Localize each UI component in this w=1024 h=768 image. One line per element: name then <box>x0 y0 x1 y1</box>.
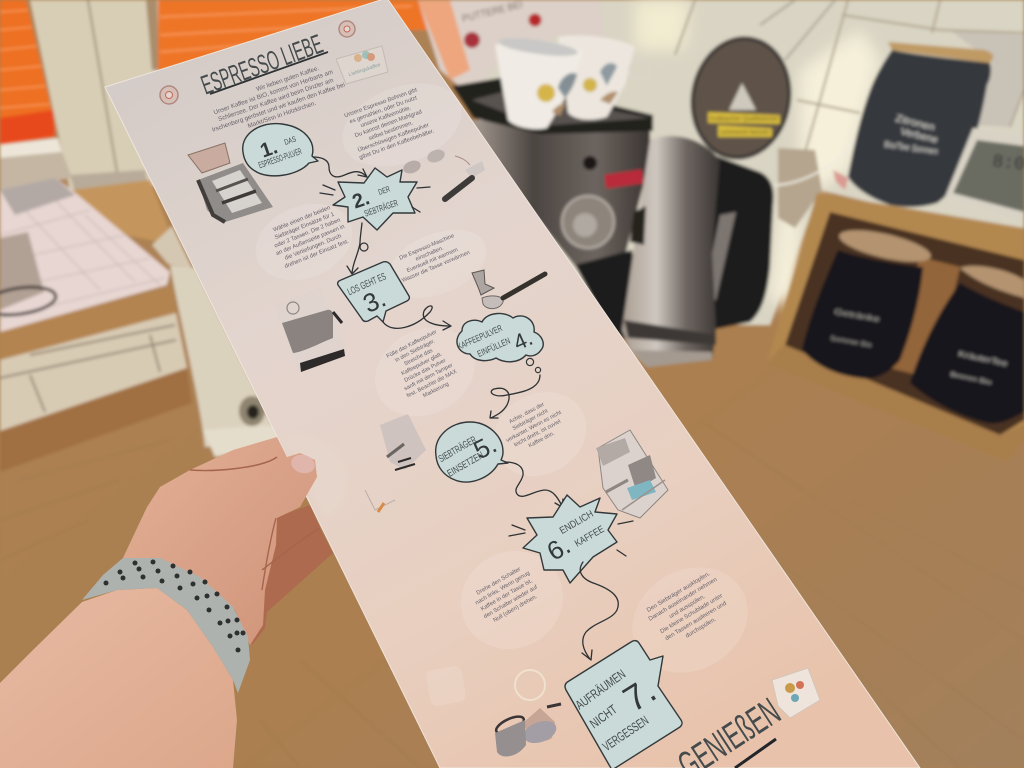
title <box>197 29 328 100</box>
text: step 4: Fülle das Kaffeepulver <box>386 329 438 360</box>
step 7: speech box: NICHT <box>587 701 620 731</box>
step 2: starburst: 2. <box>350 187 373 213</box>
arrow: 3 to 4 <box>383 306 451 330</box>
text: step 4: sanft mit dem Tamper <box>403 363 454 392</box>
background: orange blind right <box>158 0 440 72</box>
step 2: starburst: SIEBTRÄGER <box>363 198 399 219</box>
illustration: espresso machine <box>275 287 346 372</box>
watch band holes <box>104 560 246 652</box>
thumbnail <box>289 452 317 476</box>
text: step 2: drehen ist der Einsatz fest. <box>284 239 350 270</box>
background: wooden shelf <box>767 193 1024 462</box>
text: step 2: an der Außenseite passen in <box>275 224 346 257</box>
step 2: starburst: DER <box>377 184 391 197</box>
background: clock <box>945 128 1024 224</box>
step 1: bubble <box>243 124 318 176</box>
background: tile grout <box>675 0 1024 170</box>
background: kitchen: Bio/Tee Sonnen <box>884 139 939 156</box>
text: step 7: Danach auseinander nehmen <box>648 577 718 623</box>
text: step 5: Kaffee drin. <box>528 430 556 449</box>
text: step 6: Drehe den Schalter <box>476 566 522 597</box>
text: step 6: den Schalter wieder auf <box>483 584 539 620</box>
step 1: bubble: ESPRESSO-PULVER <box>257 146 303 170</box>
text: step 2: Wähle einen der beiden <box>272 205 331 234</box>
background: black jars lower <box>802 250 923 379</box>
background: cable <box>775 140 855 185</box>
step 6: starburst: 6. <box>542 530 575 567</box>
text: espresso beans: selbst bestimmen. <box>368 120 414 142</box>
illustration: cups and moka pot <box>494 704 561 756</box>
forearm <box>0 588 237 768</box>
fingers seen through sheet <box>282 434 348 520</box>
text: step 4: Streiche das <box>403 348 434 367</box>
watch band <box>82 558 250 693</box>
heading: geniessen <box>671 691 788 768</box>
paragraph backgrounds <box>244 68 767 693</box>
text: step 2: die Vertiefungen. Durch <box>284 233 342 262</box>
intro text: Irschenberg geröstet und wir kaufen den Kaffee bei <box>211 81 346 134</box>
background: kitchen: Sommer Bio <box>830 335 873 349</box>
step 7: speech box: AUFRÄUMEN <box>572 666 628 712</box>
illustration: inserting portafilter <box>365 414 426 512</box>
background: wood ledge <box>0 286 176 360</box>
text: espresso beans: Überschüssiges Kaffeepulver <box>357 121 430 154</box>
text: step 4: fest. Beachte die MAX <box>406 369 458 399</box>
text: step 4: in den Siebträger. <box>394 338 436 364</box>
intro text: Wir lieben guten Kaffee. <box>255 65 320 93</box>
background: mesh strainer <box>0 232 44 310</box>
background: tiled wall <box>420 0 1024 325</box>
arrow: 4 to 5 <box>490 375 540 418</box>
text: step 7: und ausspülen. <box>668 594 707 620</box>
step 1: bubble: 1. <box>258 136 281 162</box>
background: kitchen: Beeren Bio <box>950 371 993 387</box>
text: step 5: Siebträger nicht <box>512 408 550 432</box>
illustration: tamper and portafilter <box>472 270 545 309</box>
background: kettle lid <box>681 28 801 168</box>
illustration: filter inserts <box>401 147 485 199</box>
arrow: 2 to 3 <box>347 223 368 274</box>
step 5: circle bubble: 5. <box>468 429 501 465</box>
text: step 3: Die Espresso-Maschine <box>399 233 455 262</box>
logo cup <box>772 668 820 718</box>
finger creases <box>190 457 320 590</box>
text: step 7: Die kleine Schublade unter <box>659 593 724 635</box>
background: kitchen: Antibacher Quellwasser <box>710 116 779 122</box>
step 5: circle bubble: EINSETZEN <box>446 450 486 480</box>
background: glass jar <box>418 0 605 95</box>
text: step 6: Kaffee in der Tasse ist, <box>480 578 534 613</box>
step 5: circle bubble: SIEBTRÄGER <box>436 434 479 465</box>
step 4: thought cloud <box>456 313 543 373</box>
background: counter <box>72 180 175 245</box>
text: espresso beans: gibst Du in den Kaffeebehälter. <box>359 128 435 161</box>
text: espresso beans: Du kannst deinen Mahlgrad <box>354 109 423 139</box>
text: step 2: oder 2 Tassen. Die 2 haben <box>274 217 342 250</box>
text: step 7: durchspülen. <box>685 617 718 640</box>
background: left cupboard <box>30 0 158 190</box>
infographic sheet <box>105 0 920 768</box>
text: step 7: den Tassen ausleeren und <box>664 601 728 642</box>
background: kitchen: KräuterTee <box>958 349 1009 368</box>
background: wood trim <box>0 368 192 472</box>
background: wall socket <box>778 148 822 228</box>
palm and thumb <box>122 437 317 645</box>
illustration: grinder <box>188 143 273 223</box>
step 5: circle bubble <box>436 422 508 482</box>
step 6: starburst <box>509 495 633 583</box>
step 3: speech box: 3. <box>358 283 390 319</box>
shadowed fingers <box>240 505 333 645</box>
step 7: speech box: 7. <box>616 669 663 720</box>
background: kitchen: Getränke <box>834 307 881 324</box>
text: step 5: verkantet. Wenn es nicht <box>505 410 563 444</box>
arrow: 6 to 7 <box>580 562 618 660</box>
text: step 2: Siebträger Einsätze für 1 <box>274 212 335 241</box>
background: towel <box>0 178 170 332</box>
background: wood grain <box>0 420 1024 768</box>
text: step 6: nach links. Wenn genug <box>475 570 531 607</box>
arrow: 1 to 2 <box>313 157 367 177</box>
step 7: speech box: VERGESSEN <box>600 713 651 754</box>
step 6: starburst: ENDLICH <box>558 509 596 537</box>
step 1: bubble: DAS <box>283 134 297 147</box>
logo <box>336 46 388 84</box>
text: step 3: einschalten. <box>415 245 445 263</box>
background: window sill <box>0 138 62 158</box>
hand holding sheet <box>0 434 348 768</box>
sheet panel <box>105 0 920 768</box>
background: orange blind left <box>0 0 55 145</box>
intro text: Schliersee. Der Kaffee wird beim Dinzler am <box>217 77 334 123</box>
step 4: thought cloud: KAFFEEPULVER <box>456 323 504 352</box>
background: wall tiles left <box>0 313 187 431</box>
intro text: Markt/Sinn in Holzkirchen. <box>247 100 317 130</box>
text: step 6: Null (oben) drehen. <box>493 594 539 624</box>
illustration: ghost marks <box>425 665 545 707</box>
arrow: 5 to 6 <box>505 462 563 507</box>
background: kitchen: schmeckt besser <box>721 129 770 136</box>
background: kettle <box>622 136 720 367</box>
text: step 7: Den Siebträger ausklopfen. <box>646 571 712 614</box>
text: espresso beans: unsere Kaffeemühle. <box>360 105 412 129</box>
text: espresso beans: es gemahlen, oder Du nutzt <box>349 95 418 125</box>
text: step 3: Eventuell mit warmem <box>406 247 459 274</box>
text: step 4: Drücke das Pulver <box>404 358 447 384</box>
text: step 4: Markierung <box>422 381 450 399</box>
illustration: machine with cups <box>596 430 668 518</box>
background: bright window patches <box>635 0 880 310</box>
step 2: starburst <box>320 168 430 230</box>
stamp: top right <box>339 21 355 37</box>
text: espresso beans: Unsere Espresso Bohnen gibt <box>344 87 418 119</box>
background: kitchen: Zitronen <box>894 113 936 134</box>
text: step 5: leicht dreht, ist zuviel <box>513 419 562 448</box>
text: step 3: Wasser die Tasse vorwärmen <box>401 250 471 284</box>
stamp: top left <box>160 86 178 104</box>
step 7: speech box <box>565 641 682 768</box>
step 4: thought cloud: 4. <box>509 325 536 355</box>
background: kitchen: Verbene <box>899 126 939 146</box>
step 3: speech box: LOS GEHT ES <box>346 271 388 298</box>
intro text: Unser Kaffee ist BIO, kommt von Herbarts am <box>213 69 334 116</box>
background: milk frother <box>170 265 280 447</box>
background: espresso machine <box>470 120 650 272</box>
background: coffee cups <box>558 35 635 120</box>
text: step 5: Achte, dass der <box>508 402 546 425</box>
step 4: thought cloud: EINFÜLLEN <box>476 336 512 359</box>
step 6: starburst: KAFFEE <box>573 524 607 550</box>
text: step 4: Kaffeepulver glatt. <box>401 351 444 377</box>
logo: Lieblingskaffee <box>348 62 382 78</box>
step 3: speech box <box>338 262 409 322</box>
background: black jar on shelf <box>848 50 991 207</box>
background: kettle handle <box>688 150 774 333</box>
